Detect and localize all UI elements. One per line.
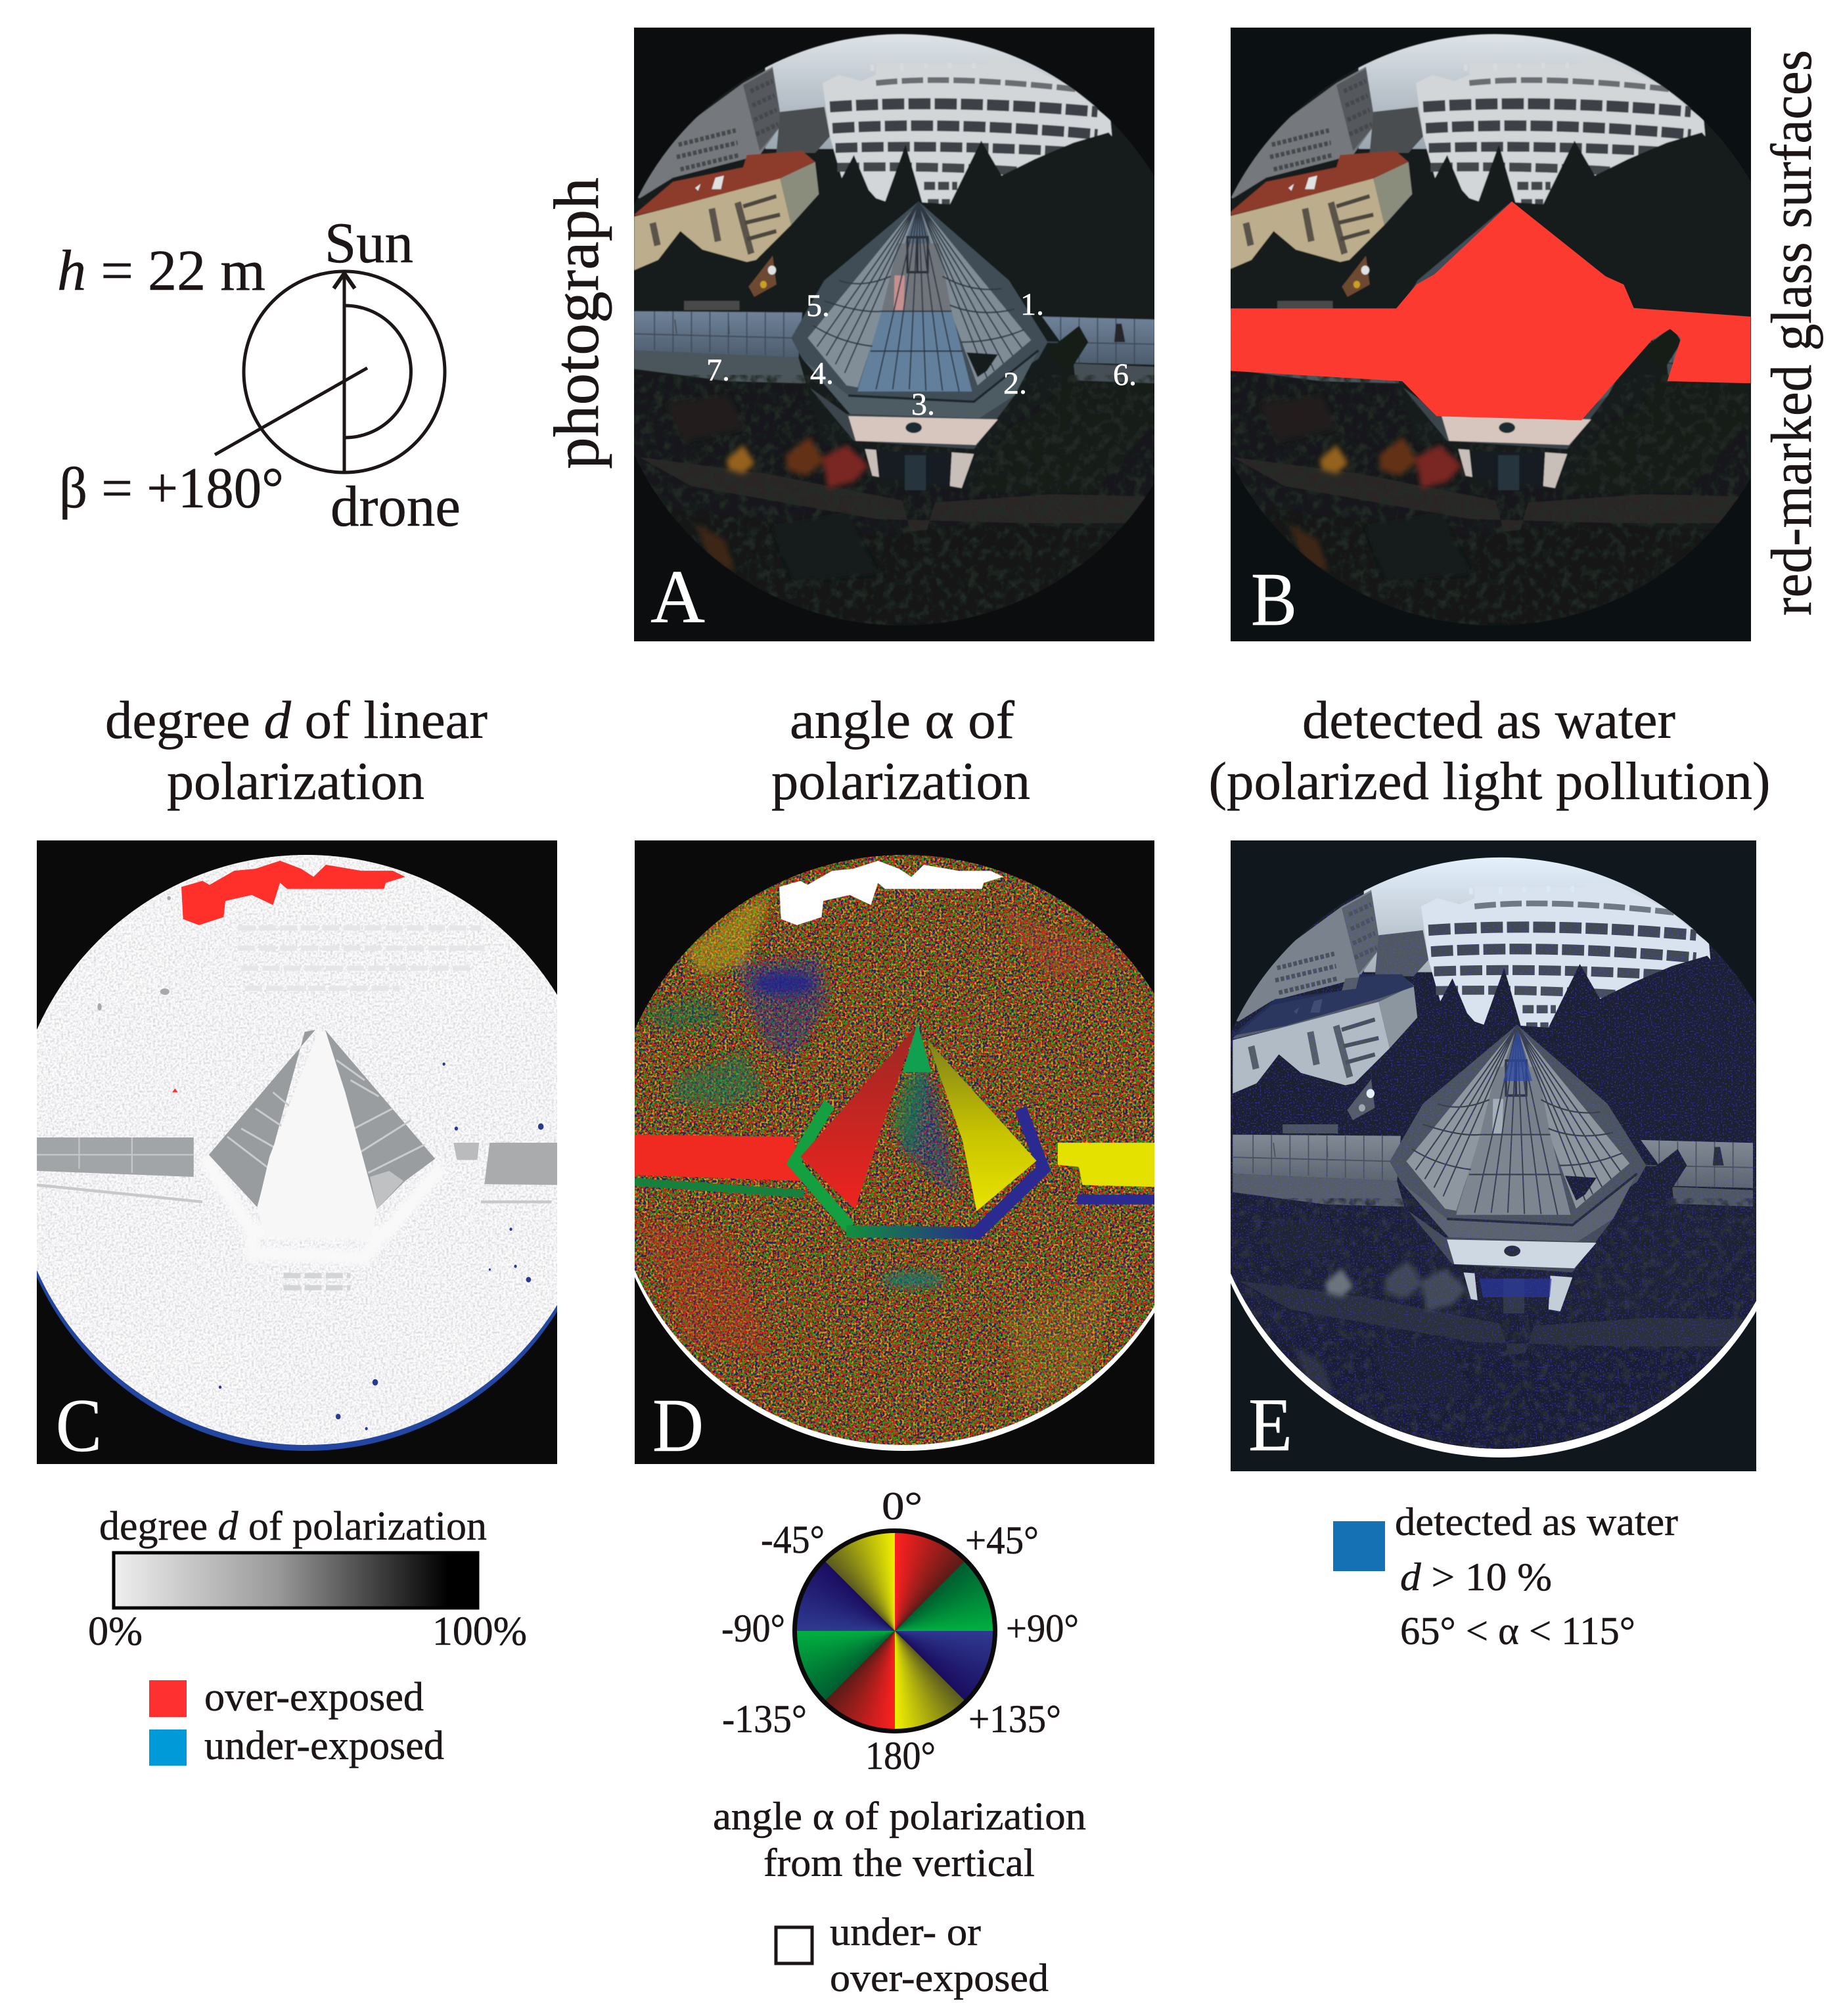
panel D: angle of polarization	[635, 840, 1154, 1464]
heading E: (polarized light pollution)	[1209, 751, 1770, 811]
heading C: polarization	[167, 751, 424, 811]
legend: angle of polarization labels	[721, 1484, 1079, 1777]
label: Sun: Sun	[325, 212, 413, 275]
rotated heading: red-marked glass surfaces: red-marked glass surfaces	[1760, 50, 1824, 616]
heading E	[1209, 690, 1770, 811]
numbered glass surfaces: 4.	[810, 356, 834, 391]
numbered glass surfaces: 3.	[911, 387, 935, 422]
panel letter D: D	[652, 1384, 704, 1467]
panel A: photograph	[634, 28, 1154, 641]
numbered glass surfaces: 7.	[706, 353, 730, 388]
label: under-exposed: under-exposed	[204, 1724, 444, 1768]
swatch: over-exposed	[149, 1680, 187, 1717]
legend: degree of polarization	[88, 1504, 527, 1768]
heading D: polarization	[771, 751, 1030, 811]
flight parameters and Sun-drone diagram	[57, 212, 461, 539]
grey colour bar	[114, 1553, 478, 1608]
label: under- or over-exposed	[830, 1910, 1049, 2000]
blue tinted roof	[1231, 974, 1414, 1036]
heading C: degree d of linear	[105, 690, 488, 750]
heading D: angle α of	[790, 690, 1015, 750]
legend: angle of polarization labels: +135°	[968, 1697, 1061, 1741]
legend: angle of polarization labels: 180°	[865, 1734, 936, 1777]
greyscale scene	[1179, 836, 1841, 1494]
legend caption: angle from the vertical	[713, 1795, 1086, 1885]
colour wheel: angle of polarization	[792, 1528, 997, 1733]
numbered glass surfaces	[708, 294, 1135, 415]
photo scene: pyramid glass roof	[634, 33, 1154, 626]
rotated heading: photograph: photograph	[541, 177, 612, 469]
label: under- or over-exposed: over-exposed	[830, 1956, 1049, 2000]
white rim	[1204, 865, 1797, 1457]
panel E: detected as water	[1179, 836, 1841, 1494]
legend: angle of polarization labels: +45°	[965, 1519, 1039, 1562]
red mask over glass	[1231, 202, 1750, 421]
polarization disc with speckle	[37, 855, 557, 1445]
legend caption: angle from the vertical: from the vertical	[763, 1841, 1035, 1885]
numbered glass surfaces: 6.	[1113, 357, 1137, 392]
numbered glass surfaces: 1.	[1020, 287, 1044, 322]
label: over-exposed: over-exposed	[204, 1675, 424, 1720]
colour-noise disc	[604, 851, 1196, 1449]
facets and markings	[37, 861, 557, 1431]
under-exposed blue rim	[37, 1270, 557, 1451]
legend text: detected as water criteria: d > 10 %	[1400, 1555, 1552, 1599]
legend text: detected as water criteria	[1395, 1500, 1678, 1653]
swatch: under-exposed	[149, 1730, 187, 1766]
numbered glass surfaces: 5.	[806, 288, 830, 323]
swatch: under- or over-exposed	[776, 1927, 812, 1963]
label: under- or over-exposed: under- or	[830, 1910, 981, 1954]
heading C	[105, 690, 488, 811]
panel letter A: A	[650, 555, 705, 639]
panel letter B: B	[1251, 558, 1297, 641]
legend: angle of polarization labels: 0°	[882, 1484, 922, 1528]
panel letter C: C	[56, 1384, 102, 1467]
label: beta angle: β = +180°	[59, 457, 284, 520]
blue speckle: pixels detected as water	[1231, 840, 1756, 1471]
legend: angle of polarization labels: +90°	[1006, 1607, 1079, 1650]
legend caption: angle from the vertical: angle α of polarization	[713, 1795, 1086, 1838]
photo scene	[1231, 33, 1751, 626]
numbered glass surfaces: 2.	[1003, 366, 1027, 401]
label: drone: drone	[330, 475, 461, 539]
swatch: detected as water	[1333, 1521, 1385, 1571]
heading D	[771, 690, 1030, 811]
bar label: 0%: 0%	[88, 1609, 143, 1654]
legend title: degree d of polarization	[99, 1504, 487, 1549]
heading E: detected as water	[1302, 690, 1675, 750]
icon: azimuth circle with arrow, arc and pointer	[215, 271, 445, 472]
over-exposed white rim	[608, 859, 1200, 1451]
panel B: red-marked glass surfaces	[1231, 28, 1751, 641]
label: flight height: h = 22 m	[57, 239, 265, 303]
panel letter E: E	[1248, 1383, 1292, 1467]
navy tint over dark vegetation	[1231, 840, 1756, 1471]
blue detected area at entrance	[1480, 1279, 1552, 1297]
legend: angle of polarization labels: -135°	[722, 1697, 807, 1741]
legend: angle of polarization labels: -90°	[721, 1607, 785, 1650]
bar label: 100%: 100%	[432, 1609, 527, 1654]
legend: angle of polarization labels: -45°	[761, 1518, 825, 1561]
legend text: detected as water criteria: 65° < α < 115°	[1400, 1609, 1635, 1653]
legend text: detected as water criteria: detected as water	[1395, 1500, 1678, 1544]
panel C: degree of linear polarization	[37, 840, 557, 1464]
blue detected area at pyramid top	[1503, 1029, 1532, 1081]
